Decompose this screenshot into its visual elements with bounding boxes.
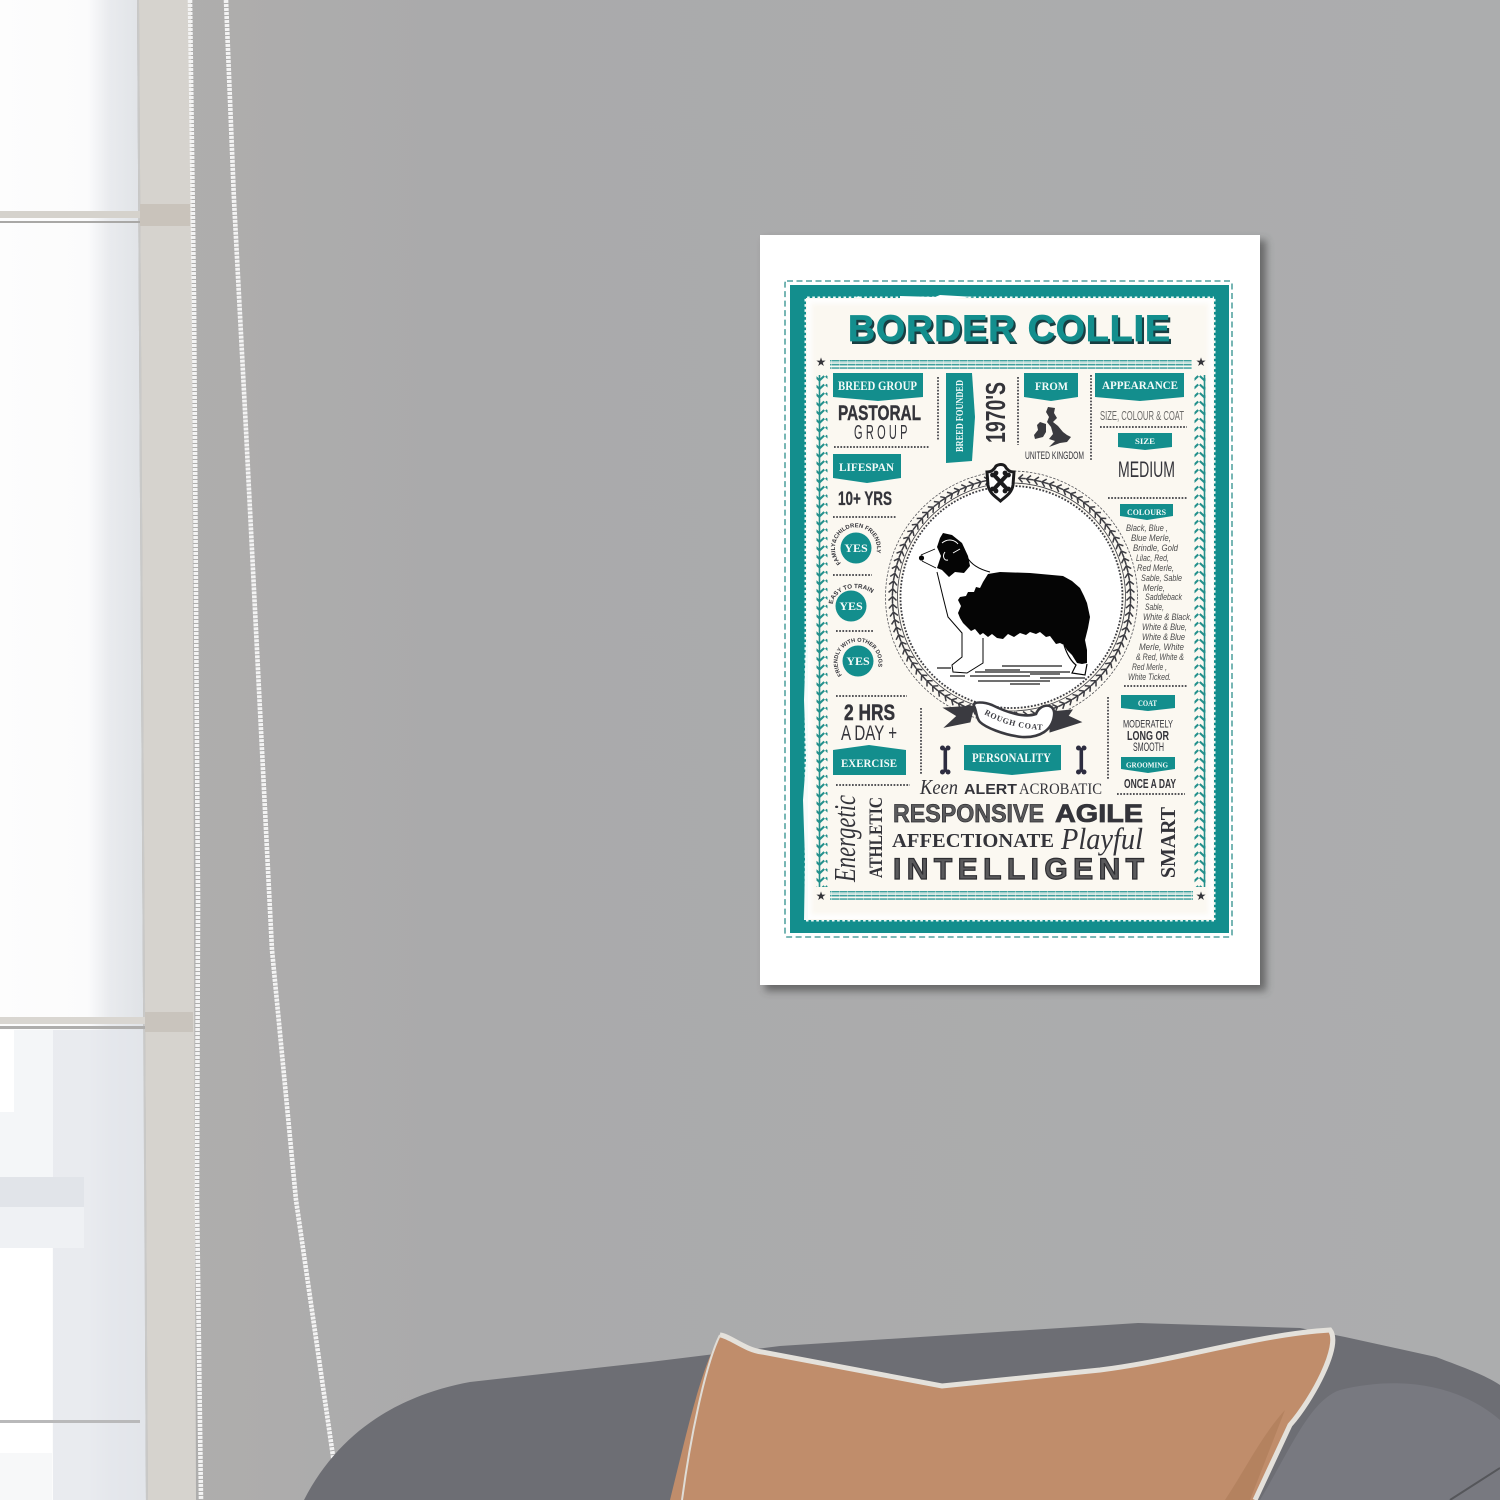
coat panel: LONG OR [1127,729,1169,743]
lifespan panel [833,454,901,510]
YES badge: easy to train: EASY TO TRAIN [828,584,874,604]
colours panel: White & Black, [1143,612,1192,622]
YES badge: family and children friendly: FAMILY&CHILDREN FRIENDLY [830,523,881,566]
appearance panel [1095,373,1184,423]
YES badge: easy to train [828,584,874,622]
exercise panel: 2 HRS [844,700,895,725]
YES badge: family and children friendly: YES [844,541,868,555]
breed founded panel [946,373,1011,463]
exercise panel: A DAY + [841,722,897,745]
exercise panel [833,700,906,775]
coat panel: COAT [1138,699,1158,708]
framed print card with shadow [760,235,1266,991]
size panel: SIZE [1135,437,1155,446]
from panel with UK map: FROM [1035,379,1068,393]
coat panel: MODERATELY [1123,718,1173,730]
appearance panel: SIZE, COLOUR & COAT [1100,408,1184,423]
personality word cloud: ATHLETIC [866,797,887,878]
personality word cloud: SMART [1156,807,1180,878]
size panel: MEDIUM [1118,457,1175,482]
window and curtain at left [0,0,196,1500]
breed group panel [833,373,923,444]
personality word cloud: AFFECTIONATE [892,830,1054,852]
side chevron borders [816,375,1206,887]
colours panel [1120,504,1192,682]
lifespan panel: 10+ YRS [838,489,892,510]
striped rule top and bottom with stars [816,355,1206,903]
grooming panel: GROOMING [1126,760,1168,770]
title: BORDER COLLIE [850,310,1173,352]
striped rule top and bottom with stars: ★ [816,355,826,369]
teal poster frame [785,281,1232,937]
coat panel: SMOOTH [1133,742,1164,754]
colours panel: Red Merle, [1137,563,1174,573]
coat panel [1121,695,1175,754]
colours panel: Blue Merle, [1131,533,1171,543]
personality word cloud: ALERT [964,781,1017,798]
breed group panel: BREED GROUP [838,379,917,393]
personality banner [964,745,1061,775]
personality word cloud: Keen [919,775,958,799]
colours panel: White & Blue [1142,632,1185,642]
colours panel: Black, Blue , [1126,523,1168,533]
exercise panel: EXERCISE [841,756,897,770]
colours panel: & Red, White & [1136,652,1184,662]
personality word cloud: INTELLIGENT [893,853,1144,886]
lifespan panel: LIFESPAN [839,460,894,474]
icon: bone right [1076,746,1086,774]
striped rule top and bottom with stars: ★ [1196,889,1206,903]
breed group panel: PASTORAL [838,402,921,425]
border collie silhouette [919,533,1090,684]
size panel [1118,433,1175,482]
from panel with UK map: UNITED KINGDOM [1025,450,1084,462]
personality word cloud [827,775,1180,886]
YES badge: easy to train: YES [839,599,863,613]
breed founded panel: BREED FOUNDED [954,380,966,452]
medallion wreath [871,471,1152,738]
personality word cloud: AGILE [1055,800,1143,828]
breed founded panel: 1970'S [980,382,1011,443]
striped rule top and bottom with stars: ★ [1196,355,1206,369]
dotted dividers [833,375,1188,794]
colours panel: COLOURS [1127,507,1166,517]
personality banner: PERSONALITY [972,751,1051,765]
YES badge: friendly with other dogs: FRIENDLY WITH OTHER DOGS [834,638,882,677]
grooming panel: ONCE A DAY [1124,777,1176,791]
personality word cloud: ACROBATIC [1019,781,1102,798]
personality word cloud: Playful [1060,821,1143,856]
appearance panel: APPEARANCE [1102,378,1178,392]
colours panel: White Ticked. [1128,672,1171,682]
striped rule top and bottom with stars: ★ [816,889,826,903]
colours panel: Red Merle , [1132,662,1167,672]
colours panel: Sable, [1145,602,1164,612]
icon: UK map [1034,407,1071,447]
from panel with UK map [1024,373,1084,462]
curtain cords [190,0,335,1500]
rough coat ribbon [942,701,1082,738]
colours panel: White & Blue, [1142,622,1187,632]
rough coat ribbon: ROUGH COAT [984,710,1042,730]
breed group panel: GROUP [854,422,911,444]
colours panel: Sable, Sable [1141,573,1182,583]
colours panel: Merle, [1143,583,1165,593]
armchair [304,1323,1500,1500]
personality word cloud: RESPONSIVE [893,800,1044,828]
colours panel: Merle, White [1139,642,1184,652]
colours panel: Brindle, Gold [1133,543,1179,553]
colours panel: Lilac, Red, [1136,553,1169,563]
colours panel: Saddleback [1145,592,1182,602]
crest shield icon [987,464,1014,501]
title: BORDER COLLIE [848,308,1171,349]
personality word cloud: Energetic [827,795,862,883]
orange cushion [670,1330,1333,1500]
YES badge: friendly with other dogs: YES [846,654,870,668]
icon: bone left [940,746,950,774]
grooming panel [1121,757,1176,791]
